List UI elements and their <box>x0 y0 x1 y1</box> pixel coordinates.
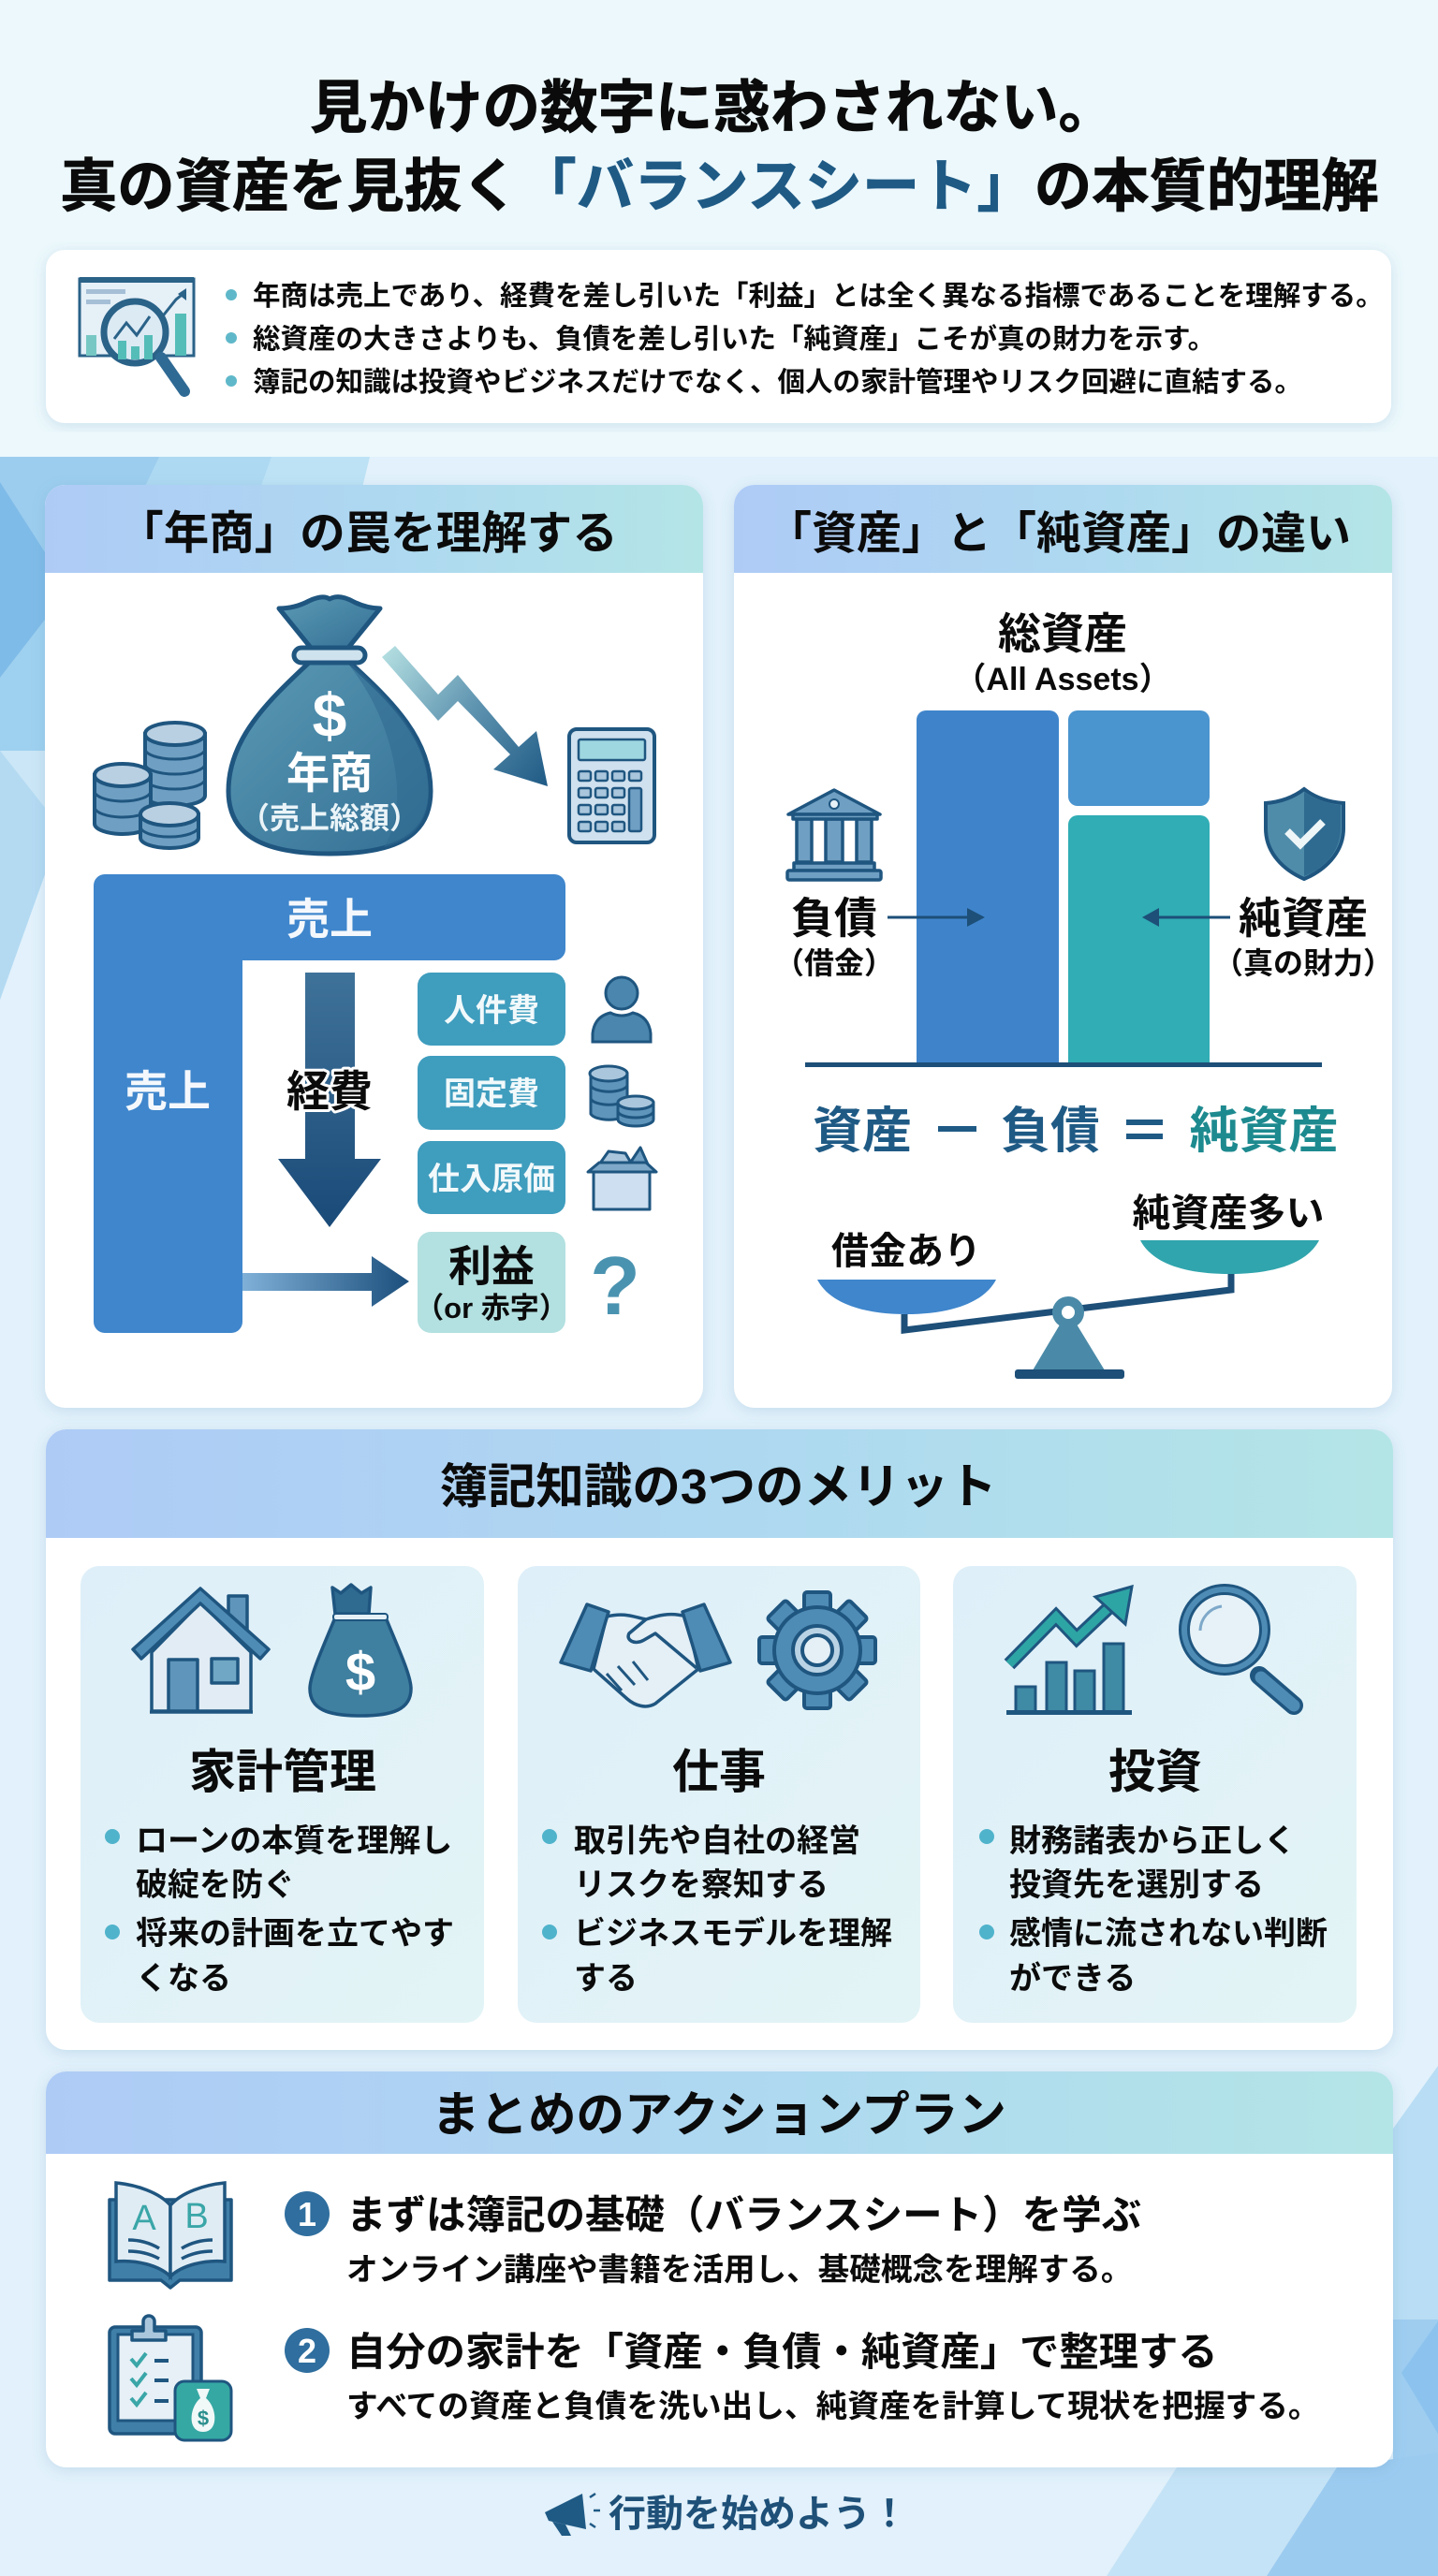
expense: 仕入原価 <box>418 1141 565 1214</box>
summary bullets <box>226 281 1384 398</box>
heading: 家計管理 <box>189 1746 376 1798</box>
heading: 「年商」の罠を理解する <box>118 508 618 559</box>
icon: handshake <box>561 1604 730 1706</box>
bullets: リスクを察知する <box>574 1867 829 1903</box>
step 1 <box>285 2191 1141 2288</box>
card: 仕事 <box>518 1566 920 2023</box>
label: 総資産: （All Assets） <box>954 662 1171 697</box>
arrow: to profit <box>242 1256 409 1307</box>
step 2 <box>285 2328 1320 2424</box>
arrow: zigzag down <box>382 646 548 786</box>
card: 家計管理 <box>81 1566 484 2023</box>
bullets: ローンの本質を理解し <box>136 1823 452 1859</box>
icon: money bag: 年商 <box>286 749 373 798</box>
heading: 仕事 <box>672 1746 766 1798</box>
expense: 人件費: 人件費 <box>444 993 539 1029</box>
bullets <box>105 1823 454 1997</box>
step 1: オンライン講座や書籍を活用し、基礎概念を理解する。 <box>346 2252 1132 2288</box>
panel: summary <box>46 250 1391 423</box>
title: 真の資産を見抜く「バランスシート」の本質的理解 <box>60 154 1379 218</box>
arrow: to liabilities <box>888 908 985 927</box>
formula <box>813 1104 1339 1159</box>
label: 負債 <box>774 894 894 980</box>
step 2: すべての資産と負債を洗い出し、純資産を計算して現状を把握する。 <box>346 2389 1320 2424</box>
icon: clipboard <box>110 2316 231 2440</box>
bullets <box>542 1823 892 1997</box>
label: 総資産 <box>954 609 1171 697</box>
heading: 「資産」と「純資産」の違い <box>767 509 1351 559</box>
bullets: ビジネスモデルを理解 <box>574 1915 892 1952</box>
step 2: 2 <box>298 2332 316 2370</box>
panel: 年商の罠 <box>45 485 703 1408</box>
balance sheet bars <box>805 710 1322 1067</box>
bullets: する <box>574 1961 638 1997</box>
heading: 投資 <box>1108 1746 1202 1798</box>
売上 L-shaped block: 売上 <box>125 1067 211 1116</box>
label: 負債: （借金） <box>774 946 894 980</box>
icon: report with magnifier <box>80 277 194 391</box>
icon: megaphone <box>545 2494 600 2536</box>
title: 見かけの数字に惑わされない。 <box>310 76 1116 140</box>
bullets: ができる <box>1009 1960 1136 1997</box>
icon: person <box>593 977 651 1042</box>
bullets: 破綻を防ぐ <box>136 1867 295 1903</box>
summary bullets: 年商は売上であり、経費を差し引いた「利益」とは全く異なる指標であることを理解する。 <box>253 281 1384 312</box>
footer call to action: 行動を始めよう！ <box>609 2494 908 2535</box>
balance scale <box>817 1192 1324 1379</box>
icon: bank <box>787 790 881 880</box>
heading: 簿記知識の3つのメリット <box>439 1459 997 1514</box>
icon: house <box>133 1588 269 1712</box>
panel: アクションプラン <box>46 2071 1393 2467</box>
bullets <box>979 1823 1328 1997</box>
arrow: to net assets <box>1142 908 1230 927</box>
icon: question mark: ? <box>590 1239 640 1332</box>
bullets: 財務諸表から正しく <box>1009 1823 1296 1859</box>
icon: calculator <box>569 729 654 842</box>
icon: book: A <box>132 2199 156 2238</box>
title <box>60 76 1379 218</box>
expense: 固定費 <box>418 1056 565 1130</box>
heading: まとめのアクションプラン <box>432 2087 1006 2142</box>
label: 純資産: 純資産 <box>1239 894 1368 943</box>
profit box <box>415 1232 568 1333</box>
bullets: 感情に流されない判断 <box>1009 1916 1328 1952</box>
formula: 資産 <box>813 1104 912 1159</box>
icon: magnifier <box>1184 1589 1294 1705</box>
label: 純資産: （真の財力） <box>1213 946 1393 980</box>
icon: book: B <box>184 2197 209 2236</box>
icon: gear <box>759 1592 875 1708</box>
panel: 3つのメリット <box>46 1429 1393 2050</box>
bullets: 投資先を選別する <box>1009 1867 1264 1903</box>
売上 L-shaped block <box>94 874 565 1333</box>
icon: small coins <box>590 1066 653 1126</box>
icon: clipboard: $ <box>198 2407 209 2430</box>
formula: 純資産 <box>1189 1104 1339 1159</box>
label: 負債: 負債 <box>791 894 877 943</box>
icon: money bag <box>310 1585 411 1716</box>
icon: growth chart <box>1006 1587 1132 1715</box>
panel: 資産と純資産 <box>734 485 1393 1408</box>
icon: box <box>588 1148 656 1209</box>
icon: book <box>110 2183 231 2288</box>
bullets: 取引先や自社の経営 <box>574 1823 860 1859</box>
step 1: まずは簿記の基礎（バランスシート）を学ぶ <box>346 2194 1141 2238</box>
bullets: 将来の計画を立てやす <box>136 1916 454 1952</box>
balance scale: 純資産多い <box>1133 1192 1324 1235</box>
icon: money bag: （売上総額） <box>240 801 419 835</box>
arrow: 経費 down: 経費 <box>286 1067 373 1116</box>
label: 総資産: 総資産 <box>998 609 1127 658</box>
expense: 固定費: 固定費 <box>444 1076 539 1112</box>
icon: money bag: $ <box>313 681 346 750</box>
売上 L-shaped block: 売上 <box>286 895 373 944</box>
icon: coins <box>95 723 205 848</box>
expense: 仕入原価: 仕入原価 <box>428 1162 555 1197</box>
icon: money bag <box>228 597 431 854</box>
profit box: （or 赤字） <box>415 1292 568 1325</box>
card: 投資 <box>953 1566 1357 2023</box>
bullets: くなる <box>136 1961 231 1997</box>
icon: shield <box>1266 789 1343 879</box>
step 2: 自分の家計を「資産・負債・純資産」で整理する <box>346 2330 1218 2374</box>
balance scale: 借金あり <box>831 1231 981 1272</box>
step 1: 1 <box>298 2195 316 2233</box>
label: 純資産 <box>1213 894 1393 980</box>
profit box: 利益 <box>448 1242 535 1291</box>
arrow: 経費 down <box>278 973 381 1227</box>
summary bullets: 総資産の大きさよりも、負債を差し引いた「純資産」こそが真の財力を示す。 <box>253 323 1215 355</box>
summary bullets: 簿記の知識は投資やビジネスだけでなく、個人の家計管理やリスク回避に直結する。 <box>253 367 1302 398</box>
expense: 人件費 <box>418 973 565 1046</box>
formula: 負債 <box>1001 1104 1100 1159</box>
icon: money bag: $ <box>345 1642 375 1703</box>
